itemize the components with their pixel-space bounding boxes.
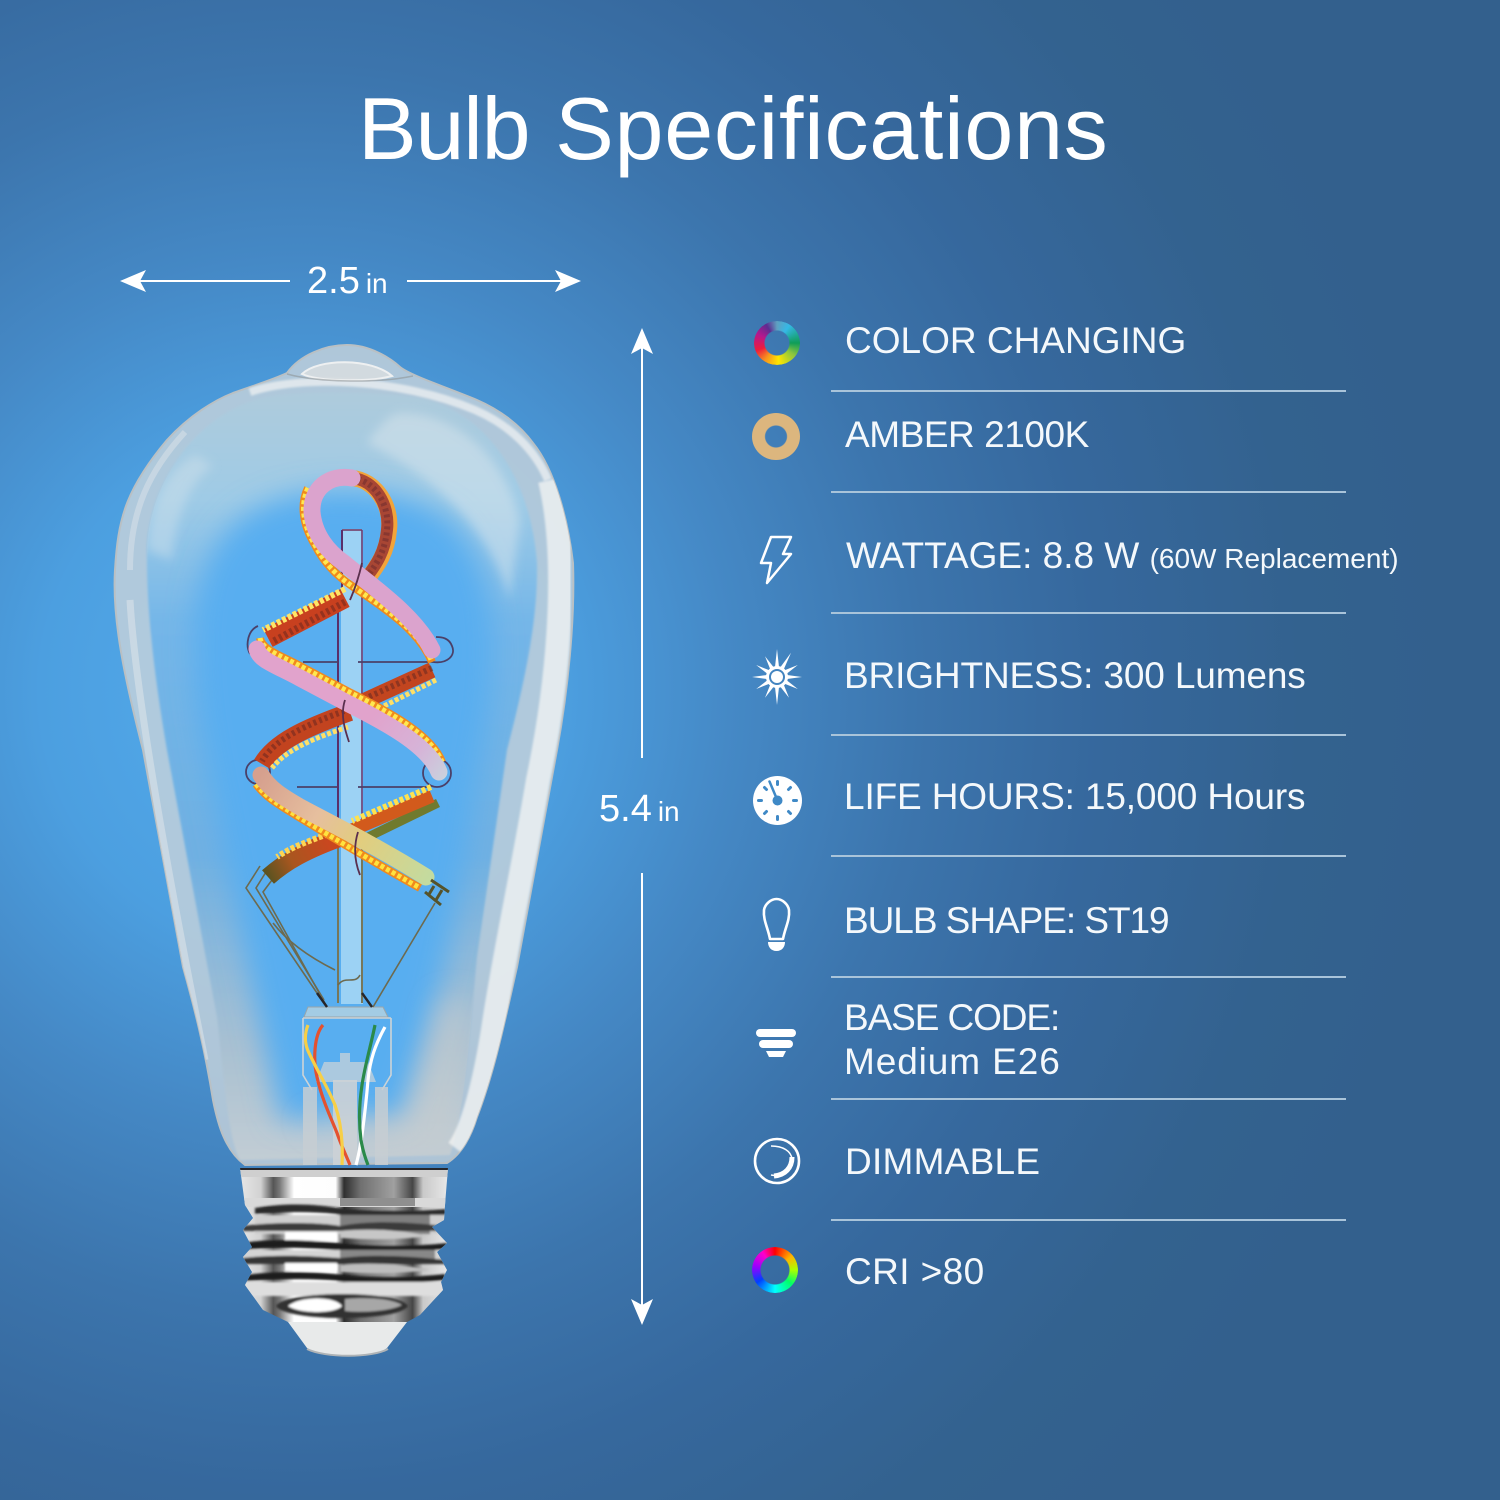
icon: bulb shape [762, 898, 790, 951]
icon: color changing ring [754, 321, 800, 365]
label: base code: BASE CODE: [844, 997, 1059, 1038]
title: Bulb Specifications [358, 79, 1109, 178]
height dimension arrow: 5.4in [599, 788, 680, 830]
icon: CRI ring [752, 1247, 798, 1293]
label: base code: Medium E26 [844, 1041, 1061, 1082]
icon: amber ring [752, 413, 800, 460]
icon: sun [752, 649, 802, 705]
rule lines [831, 390, 1346, 1221]
support wires [246, 626, 453, 1007]
label: wattage: WATTAGE: 8.8 W (60W Replacement) [846, 535, 1399, 576]
wires [305, 1025, 385, 1165]
label: life hours: LIFE HOURS: 15,000 Hours [844, 776, 1305, 817]
screw base [238, 1166, 450, 1356]
glass stem [303, 530, 391, 1165]
filament front ribbons [256, 477, 449, 905]
glass envelope [115, 345, 573, 1165]
label: dimmable: DIMMABLE [845, 1141, 1040, 1182]
icon: dimmable [754, 1138, 800, 1184]
bulb illustration [114, 344, 574, 1357]
label: base code [844, 997, 1061, 1082]
label: amber: AMBER 2100K [845, 414, 1089, 455]
label: CRI: CRI >80 [845, 1251, 985, 1292]
icon: base code [756, 1029, 796, 1057]
filament back ribbons [262, 478, 438, 877]
label: brightness: BRIGHTNESS: 300 Lumens [844, 655, 1306, 696]
label: bulb shape: BULB SHAPE: ST19 [844, 900, 1169, 941]
icon: clock [753, 776, 802, 825]
width dimension arrow: 2.5in [307, 260, 388, 302]
label: color changing: COLOR CHANGING [845, 320, 1186, 361]
icon: lightning bolt [760, 536, 792, 584]
